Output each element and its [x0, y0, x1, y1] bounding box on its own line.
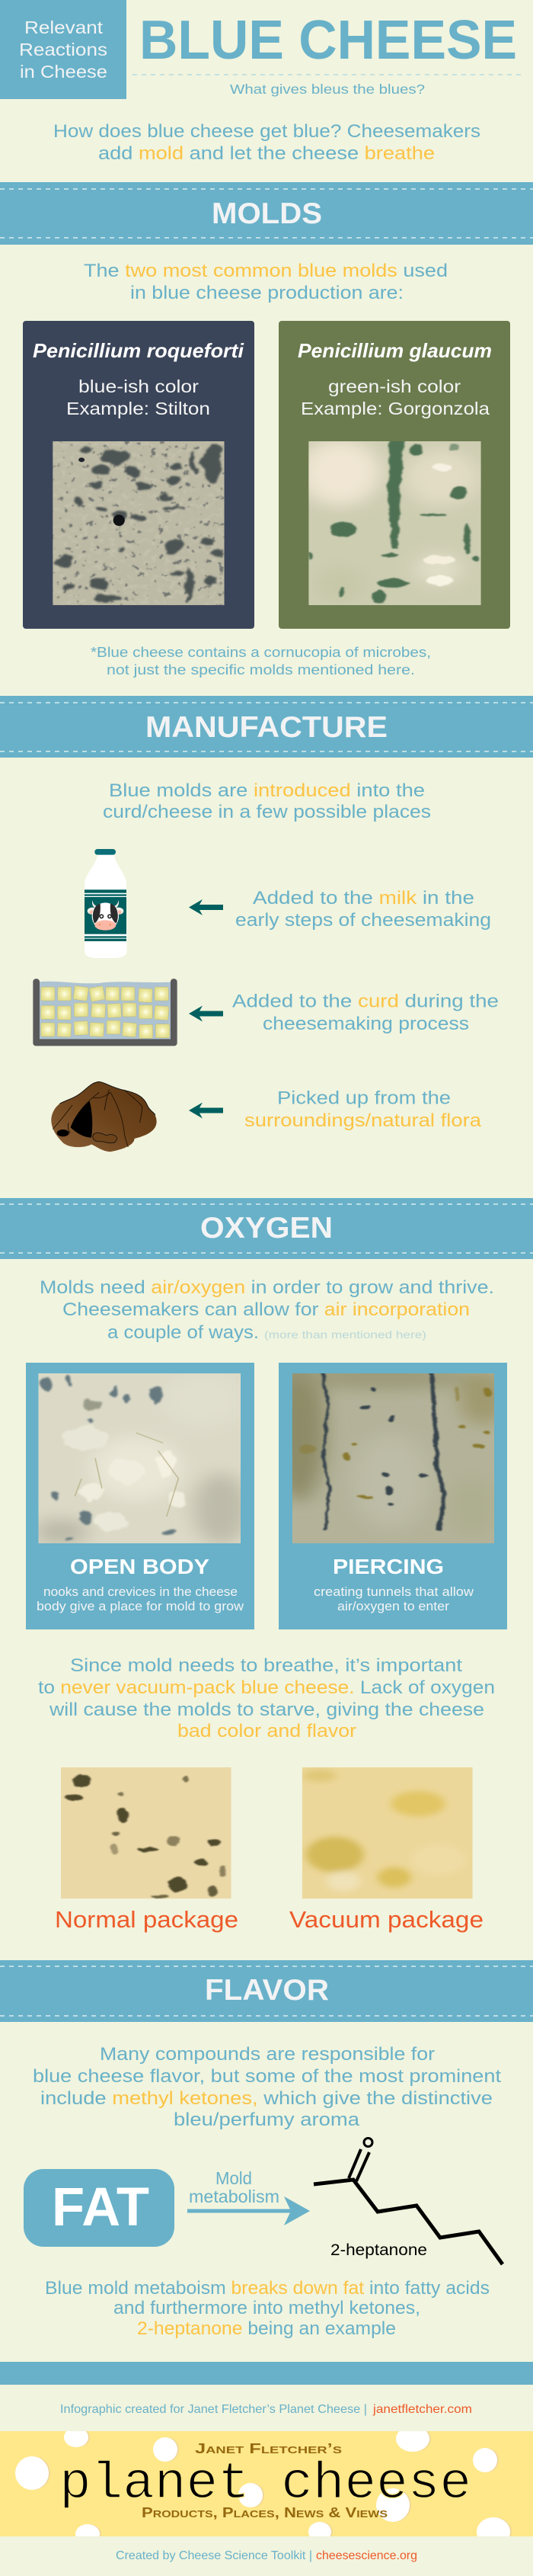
icon: milk bottle with cow label — [85, 849, 127, 958]
section banner: oxygen — [0, 1198, 533, 1259]
section banner: molds: MOLDS — [212, 197, 322, 230]
text: added to the curd: cheesemaking process — [263, 1014, 469, 1034]
section banner: flavor: FLAVOR — [205, 1974, 329, 2007]
molds intro text: in blue cheese production are: — [130, 283, 404, 303]
panel: Penicillium glaucum: green-ish color — [328, 376, 461, 396]
panel: Penicillium roqueforti: blue-ish color — [78, 376, 199, 396]
flavor intro text: blue cheese flavor, but some of the most prominent — [33, 2066, 501, 2087]
text: added to the milk: Added to the milk in the — [253, 888, 474, 908]
text: never vacuum-pack: to never vacuum-pack blue cheese. Lack of oxygen — [38, 1677, 495, 1698]
text: never vacuum-pack: will cause the molds to starve, giving the cheese — [49, 1700, 484, 1720]
panel: Penicillium roqueforti — [23, 321, 254, 629]
label: vacuum package: Vacuum package — [289, 1906, 484, 1933]
panel: piercing: air/oxygen to enter — [337, 1599, 449, 1613]
molds intro text: The two most common blue molds used — [84, 261, 448, 281]
text: breakdown explanation — [45, 2278, 490, 2339]
title: BLUE CHEESE — [139, 9, 517, 71]
subtitle: What gives bleus the blues? — [230, 82, 425, 97]
footnote: *Blue cheese contains a cornucopia of microbes, — [91, 645, 431, 660]
section banner: manufacture: MANUFACTURE — [145, 711, 388, 744]
panel: open body: OPEN BODY — [70, 1555, 209, 1578]
panel: open body: body give a place for mold to grow — [37, 1599, 244, 1613]
manufacture intro text — [103, 780, 431, 822]
panel: Penicillium roqueforti: Example: Stilton — [66, 399, 210, 418]
arrow: surroundings — [189, 1102, 223, 1119]
text: added to the curd: Added to the curd during the — [232, 991, 499, 1012]
panel: Penicillium glaucum: Example: Gorgonzola — [301, 399, 490, 418]
section banner: flavor — [0, 1960, 533, 2022]
arrow: mold metabolism: metabolism — [189, 2187, 279, 2206]
oxygen intro text: Molds need air/oxygen in order to grow and thrive. — [40, 1277, 494, 1298]
oxygen intro text: Cheesemakers can allow for air incorporation — [62, 1299, 470, 1320]
footnote: not just the specific molds mentioned here. — [107, 662, 415, 678]
logo: planet cheese: Products, Places, News & Views — [142, 2505, 388, 2520]
header tag: Relevant Reactions in Cheese: Relevant — [24, 18, 104, 37]
panel: Penicillium glaucum — [279, 321, 510, 629]
panel: piercing — [272, 1359, 507, 1629]
flavor intro text: include methyl ketones, which give the distinctive — [40, 2088, 493, 2109]
text: breakdown explanation: 2-heptanone being an example — [137, 2318, 396, 2339]
text: breakdown explanation: Blue mold metaboism breaks down fat into fatty acids — [45, 2278, 490, 2299]
photo: pierced cheese — [292, 1373, 495, 1543]
photo: normal package cheese — [61, 1767, 231, 1898]
section banner: molds — [0, 182, 533, 245]
section banner: oxygen: OXYGEN — [200, 1212, 333, 1245]
text: added to the curd — [232, 991, 499, 1034]
header tag: Relevant Reactions in Cheese: in Cheese — [20, 62, 107, 82]
header tag: Relevant Reactions in Cheese: Reactions — [19, 40, 107, 59]
molecule: 2-heptanone: 2-heptanone — [330, 2241, 427, 2259]
panel: piercing: creating tunnels that allow — [314, 1584, 474, 1599]
text: never vacuum-pack: bad color and flavor — [177, 1721, 356, 1741]
icon: vat of curds — [33, 979, 177, 1046]
FAT box — [24, 2169, 174, 2247]
oxygen intro text — [40, 1277, 494, 1343]
photo: green-veined Gorgonzola — [299, 440, 481, 605]
flavor intro text: Many compounds are responsible for — [100, 2044, 435, 2065]
text: never vacuum-pack — [38, 1655, 495, 1741]
credit: Janet Fletcher: Infographic created for Janet Fletcher’s Planet Cheese | — [60, 2403, 367, 2416]
panel: Penicillium roqueforti: Penicillium roqueforti — [33, 339, 244, 362]
text: never vacuum-pack: Since mold needs to breathe, it’s important — [70, 1655, 462, 1676]
arrow: curd — [189, 1006, 223, 1021]
flavor intro text: bleu/perfumy aroma — [174, 2110, 360, 2130]
footnote — [91, 645, 431, 678]
label: normal package: Normal package — [55, 1906, 238, 1933]
closing bar — [0, 2362, 533, 2385]
flavor intro text — [33, 2044, 501, 2130]
arrow: mold metabolism — [187, 2168, 310, 2225]
manufacture intro text: Blue molds are introduced into the — [109, 780, 425, 801]
credit: Cheese Science Toolkit: cheesescience.org — [316, 2549, 417, 2562]
photo: blue-veined Stilton — [53, 441, 225, 605]
oxygen intro text: (more than mentioned here) — [264, 1328, 426, 1341]
panel: Penicillium glaucum: Penicillium glaucum — [298, 339, 492, 362]
oxygen intro text: a couple of ways. — [107, 1322, 259, 1343]
intro text: add mold and let the cheese breathe — [98, 143, 435, 164]
icon: cave — [51, 1081, 157, 1152]
manufacture intro text: curd/cheese in a few possible places — [103, 802, 431, 822]
arrow: milk — [189, 899, 223, 915]
panel: piercing: PIERCING — [333, 1555, 444, 1578]
arrow: mold metabolism: Mold — [215, 2168, 252, 2188]
text: picked up from the surroundings: Picked up from the — [277, 1088, 451, 1108]
photo: open body cheese — [34, 1373, 248, 1545]
text: breakdown explanation: and furthermore into methyl ketones, — [113, 2298, 420, 2318]
credit: Janet Fletcher: janetfletcher.com — [372, 2403, 472, 2416]
credit: Cheese Science Toolkit: Created by Cheese Science Toolkit | — [116, 2549, 312, 2562]
text: picked up from the surroundings — [244, 1088, 482, 1131]
logo: planet cheese: planet cheese — [59, 2455, 471, 2514]
molecule: 2-heptanone — [314, 2139, 503, 2264]
text: added to the milk — [235, 888, 491, 931]
credit: Cheese Science Toolkit — [116, 2549, 417, 2562]
panel: open body: nooks and crevices in the cheese — [43, 1584, 238, 1599]
intro text — [53, 121, 480, 164]
header tag: Relevant Reactions in Cheese — [0, 0, 126, 99]
logo: planet cheese: Janet Fletcher’s — [195, 2441, 342, 2456]
FAT box: FAT — [52, 2177, 149, 2238]
photo: vacuum package cheese — [302, 1767, 472, 1898]
logo: planet cheese — [0, 2431, 533, 2536]
text: picked up from the surroundings: surroundings/natural flora — [244, 1110, 482, 1131]
text: added to the milk: early steps of cheesemaking — [235, 910, 491, 931]
molds intro text — [84, 261, 448, 303]
section banner: manufacture — [0, 696, 533, 758]
panel: open body — [26, 1363, 254, 1629]
intro text: How does blue cheese get blue? Cheesemakers — [53, 121, 480, 142]
